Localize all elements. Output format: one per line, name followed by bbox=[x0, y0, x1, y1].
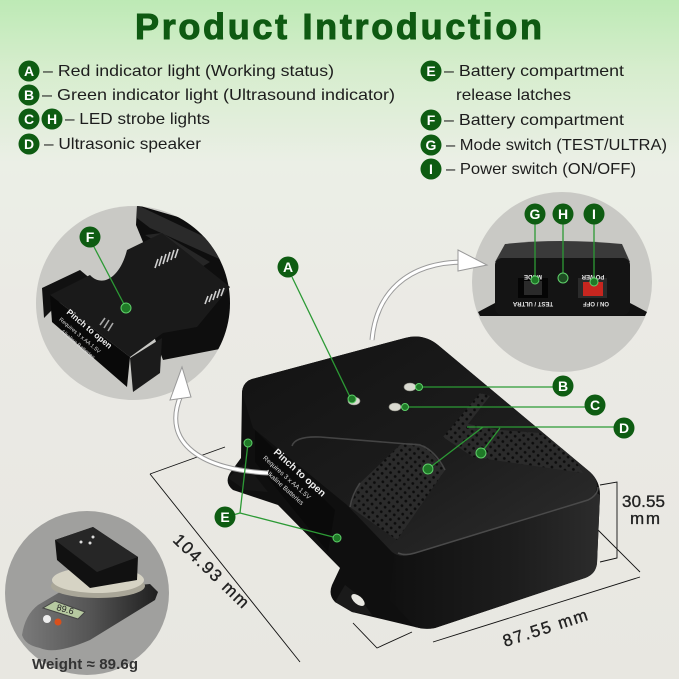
callout B: B bbox=[558, 378, 568, 394]
dimension: length: 104.93 mm bbox=[169, 530, 253, 612]
upside-down labels bbox=[512, 273, 609, 306]
callout A bbox=[278, 256, 356, 403]
inset: battery compartment bbox=[36, 205, 240, 400]
upside-down labels: TEST / ULTRA bbox=[512, 300, 553, 306]
battery holder label bbox=[52, 306, 114, 364]
scale platter bbox=[51, 567, 145, 598]
legend: left column bbox=[18, 60, 395, 154]
scale display bbox=[43, 601, 85, 619]
callout E: E bbox=[220, 509, 230, 525]
speaker grille left bbox=[350, 443, 445, 540]
left side tab bbox=[228, 463, 268, 492]
front edge highlight bbox=[398, 487, 598, 554]
legend item E: – Battery compartment bbox=[444, 63, 625, 80]
legend item E bbox=[420, 60, 625, 104]
legend: right column bbox=[420, 60, 667, 180]
dimension: width: 87.55 mm bbox=[500, 606, 590, 651]
front face bbox=[390, 490, 600, 629]
top face bbox=[242, 337, 597, 556]
legend item I: – Power switch (ON/OFF) bbox=[446, 161, 636, 178]
callout G bbox=[524, 204, 546, 284]
dimension: height: mm bbox=[630, 509, 660, 528]
power switch bbox=[578, 278, 607, 298]
callout D: D bbox=[619, 420, 629, 436]
dimension: height: 30.55 bbox=[622, 492, 665, 511]
legend item F bbox=[420, 110, 625, 130]
mode switch bbox=[518, 278, 548, 298]
scale buttons bbox=[43, 615, 62, 626]
arrow: to battery inset bbox=[170, 367, 268, 473]
dimension lines bbox=[150, 447, 640, 662]
arrow: to switches inset bbox=[372, 250, 487, 340]
upside-down labels: POWER bbox=[581, 273, 604, 279]
title: Product Introduction bbox=[135, 6, 542, 47]
callout C: C bbox=[590, 397, 600, 413]
legend item D: D bbox=[24, 136, 34, 152]
battery holder label: Alkaline Batteries bbox=[59, 329, 96, 361]
LED lights bbox=[348, 383, 416, 411]
legend item D: – Ultrasonic speaker bbox=[44, 136, 202, 153]
legend item D bbox=[18, 134, 202, 154]
callout C bbox=[402, 394, 606, 416]
callout E bbox=[214, 439, 341, 542]
mounting tab bbox=[335, 585, 372, 615]
callout I bbox=[584, 204, 604, 286]
callout I: I bbox=[592, 206, 596, 222]
door label bbox=[255, 444, 327, 514]
weight label: Weight ≈ 89.6g bbox=[32, 656, 138, 673]
battery holder label: Requires 3 x AA 1.5V bbox=[58, 317, 101, 355]
legend item F: – Battery compartment bbox=[444, 112, 625, 129]
battery holder label: Pinch to open bbox=[65, 307, 114, 351]
legend item I bbox=[420, 158, 636, 180]
door label: Requires 3 x AA 1.5V bbox=[261, 455, 312, 502]
legend item A: A bbox=[24, 63, 34, 79]
speaker grille right bbox=[443, 393, 583, 473]
legend item B: B bbox=[24, 87, 34, 103]
moulded groove bbox=[292, 437, 445, 507]
callout A: A bbox=[283, 259, 293, 275]
callout D bbox=[423, 418, 634, 474]
callout F: F bbox=[86, 229, 95, 245]
device body silhouette bbox=[228, 337, 600, 629]
callout F bbox=[80, 226, 131, 313]
legend item C and H: H bbox=[47, 111, 57, 127]
legend item C and H bbox=[18, 108, 210, 130]
callout G: G bbox=[530, 206, 541, 222]
legend item B: – Green indicator light (Ultrasound indicator) bbox=[42, 87, 395, 104]
legend item G: G bbox=[426, 137, 437, 153]
legend item G: – Mode switch (TEST/ULTRA) bbox=[446, 137, 667, 154]
legend item A: – Red indicator light (Working status) bbox=[43, 63, 334, 80]
battery door panel bbox=[255, 430, 335, 552]
legend item E: E bbox=[426, 63, 436, 79]
legend item E: release latches bbox=[456, 87, 571, 104]
upside-down labels: MODE bbox=[524, 273, 542, 279]
dimension: height bbox=[622, 492, 665, 528]
door label: Alkaline Batteries bbox=[263, 468, 305, 507]
scale display: 89.6 bbox=[55, 602, 75, 616]
scale base bbox=[22, 584, 158, 650]
legend item A bbox=[18, 60, 334, 82]
main device bbox=[228, 337, 600, 629]
upside-down labels: ON / OFF bbox=[583, 300, 609, 306]
legend item C and H: C bbox=[24, 111, 34, 127]
legend item I: I bbox=[429, 161, 433, 177]
legend item C and H: – LED strobe lights bbox=[65, 111, 210, 128]
door label: Pinch to open bbox=[271, 447, 327, 499]
inset: weight on scale bbox=[5, 511, 169, 675]
legend item B bbox=[18, 84, 395, 106]
inset: switches bbox=[472, 192, 652, 372]
device on scale bbox=[55, 527, 138, 588]
legend item F: F bbox=[427, 112, 436, 128]
callout B bbox=[416, 376, 574, 396]
callout H bbox=[552, 204, 574, 283]
callout H: H bbox=[558, 206, 568, 222]
